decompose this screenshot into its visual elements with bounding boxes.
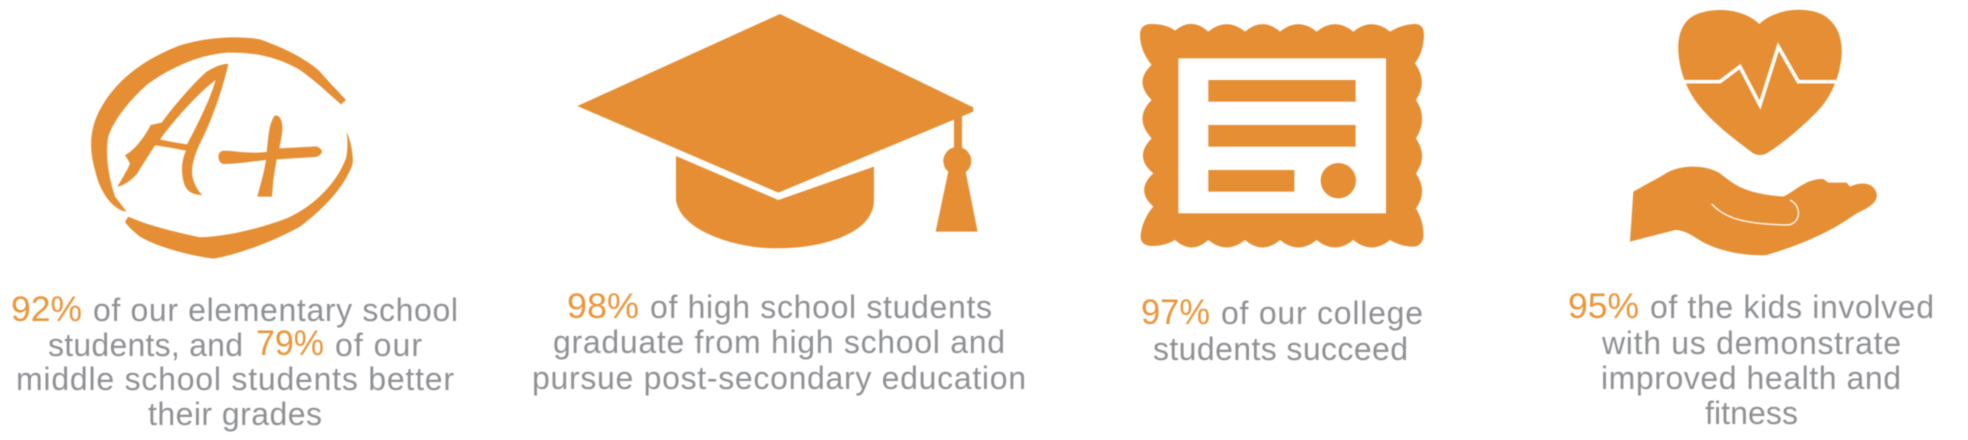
text: 98% high school: of high school students (650, 289, 992, 325)
text: 95% health (1568, 287, 1934, 431)
text: 98% high school: graduate from high school and (553, 324, 1005, 360)
text: 98% high school (532, 287, 1026, 396)
text: 97% college: of our college (1221, 295, 1423, 331)
text: 98% high school: pursue post-secondary education (532, 360, 1026, 396)
text: 92% and 79% grades: middle school students better (16, 361, 454, 397)
icon: heart with pulse above open hand (1630, 10, 1877, 255)
text: 95% health: improved health and (1601, 360, 1901, 396)
text: 92% and 79% grades (11, 290, 458, 432)
icon: graduation cap (577, 14, 978, 248)
text: 97% college: 97% (1141, 293, 1210, 332)
text: 92% and 79% grades: 92% (11, 290, 82, 329)
text: 92% and 79% grades: of our elementary school (93, 292, 458, 328)
text: 97% college: students succeed (1153, 331, 1408, 367)
text: 95% health: fitness (1705, 395, 1798, 431)
text: 92% and 79% grades: students, and (48, 327, 243, 363)
text: 92% and 79% grades: 79% (256, 324, 324, 363)
text: 92% and 79% grades: their grades (148, 396, 322, 432)
text: 92% and 79% grades: of our (335, 327, 422, 363)
icon: diploma certificate (1140, 24, 1424, 247)
text: 98% high school: 98% (567, 287, 639, 326)
icon: A+ grade circled (91, 37, 353, 259)
text: 97% college (1141, 293, 1423, 367)
text: 95% health: of the kids involved (1650, 289, 1934, 325)
text: 95% health: 95% (1568, 287, 1639, 326)
text: 95% health: with us demonstrate (1601, 325, 1901, 361)
